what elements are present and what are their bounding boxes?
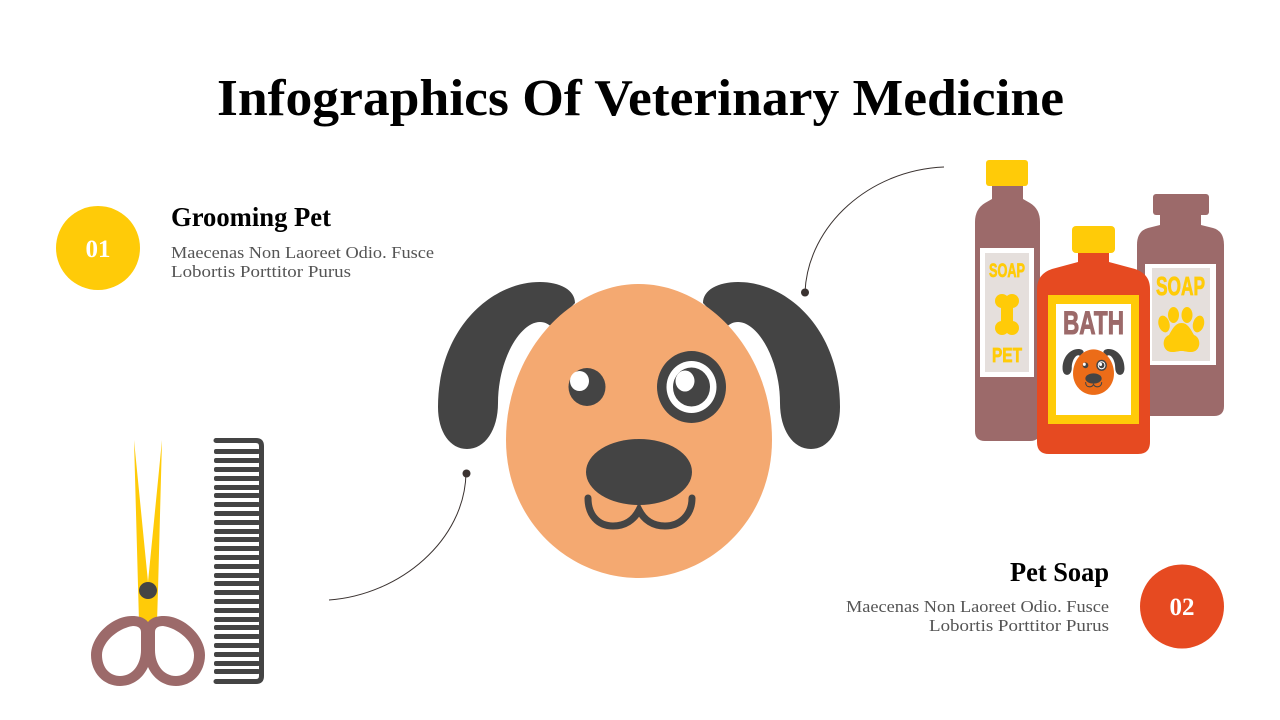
title: Infographics Of Veterinary Medicine — [217, 70, 1064, 127]
icon: tall soap bottle: PET — [992, 345, 1022, 367]
icon: wide soap bottle — [1137, 194, 1224, 416]
badge 02 — [1140, 564, 1224, 648]
icon: paw print — [1156, 307, 1206, 352]
arrow: connector from dog to grooming tools — [329, 470, 470, 600]
text block: grooming description: Lobortis Porttitor Purus — [171, 262, 351, 281]
heading: grooming pet: Grooming Pet — [171, 202, 331, 232]
text block: grooming description — [171, 243, 434, 281]
badge 01: 01 — [86, 236, 110, 263]
heading: pet soap: Pet Soap — [1010, 557, 1109, 587]
icon: bath bottle — [1037, 226, 1150, 454]
panel: 02 pet soap — [846, 557, 1224, 648]
icon: bone — [995, 294, 1019, 335]
badge 01 — [56, 206, 140, 290]
icon: tall soap bottle: SOAP — [989, 261, 1025, 282]
badge 02: 02 — [1170, 594, 1194, 621]
text block: pet soap description: Lobortis Porttitor Purus — [929, 616, 1109, 635]
icon: comb — [214, 438, 264, 684]
text block: pet soap description — [846, 597, 1109, 635]
icon: small dog face on label — [1063, 349, 1124, 395]
icon: tall soap bottle — [975, 160, 1040, 441]
icon: wide soap bottle: SOAP — [1156, 271, 1205, 301]
text block: grooming description: Maecenas Non Laoreet Odio. Fusce — [171, 243, 434, 262]
icon: bath bottle: BATH — [1063, 305, 1124, 341]
text block: pet soap description: Maecenas Non Laoreet Odio. Fusce — [846, 597, 1109, 616]
arrow: connector from dog to shampoo bottles — [801, 167, 944, 296]
icon: scissors — [91, 440, 205, 686]
panel: 01 grooming pet — [56, 202, 434, 290]
icon: dog face — [438, 282, 840, 578]
